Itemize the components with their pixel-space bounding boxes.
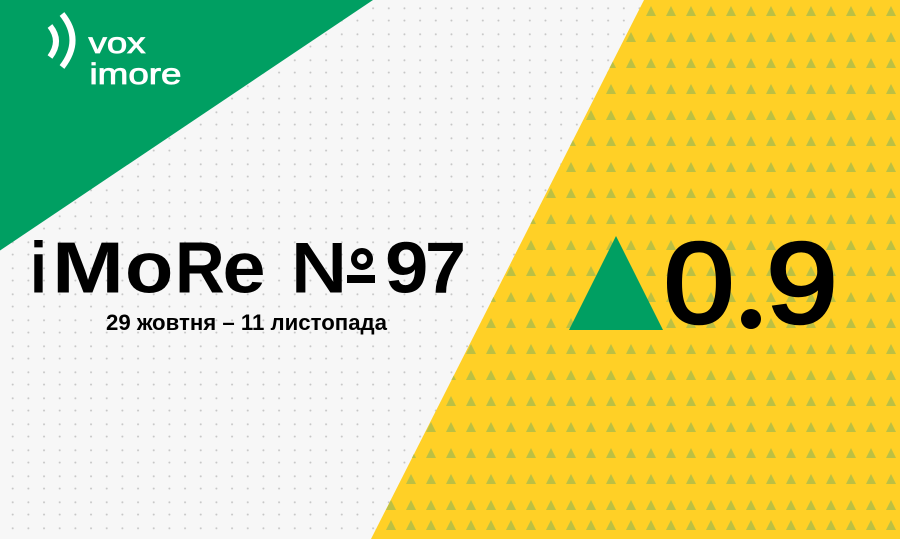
title: iMoRe №97: 9	[385, 228, 428, 308]
icon: green up triangle	[569, 236, 663, 330]
date subtitle: 29 жовтня – 11 листопада	[106, 310, 388, 335]
panel: green corner	[0, 0, 373, 250]
title: iMoRe №97: 7	[425, 228, 466, 308]
title: iMoRe №97: M	[52, 228, 124, 308]
title: iMoRe №97: №	[291, 228, 377, 308]
logo wordmark	[88, 27, 182, 91]
panel: yellow triangle pattern area	[371, 0, 900, 539]
title: iMoRe №97: i	[30, 228, 47, 308]
title: iMoRe №97	[34, 240, 463, 293]
value: 0.9: 9	[766, 220, 838, 348]
title: iMoRe №97: e	[222, 228, 266, 308]
value: 0.9: 0	[664, 220, 734, 348]
title: iMoRe №97: R	[175, 228, 225, 308]
title: iMoRe №97: o	[125, 228, 173, 308]
value: 0.9	[664, 220, 838, 348]
icon: sound waves	[50, 14, 72, 67]
logo wordmark: vox	[88, 27, 146, 60]
logo: vox imore	[50, 14, 182, 91]
logo wordmark: imore	[90, 58, 182, 91]
value: 0.9: .	[746, 292, 756, 333]
